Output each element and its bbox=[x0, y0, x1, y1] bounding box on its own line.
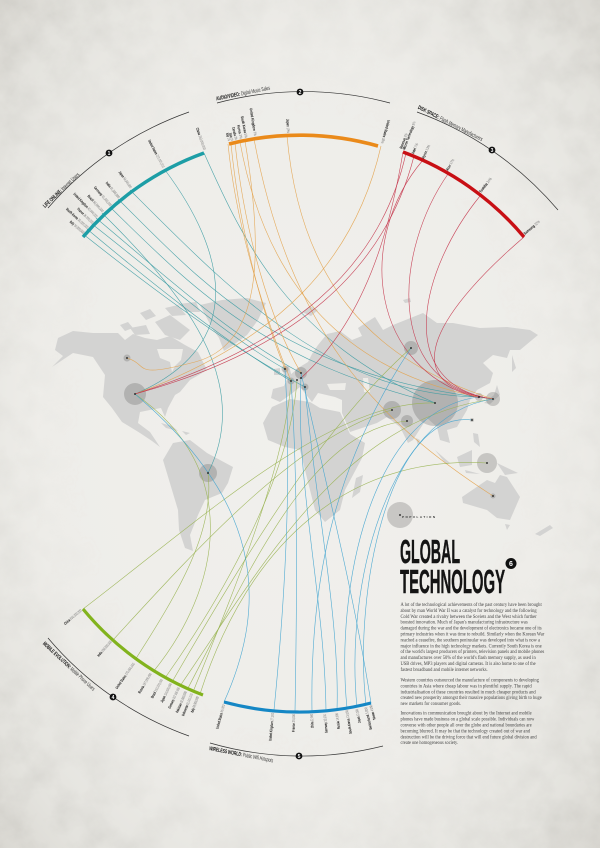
heading: audio video: AUDIO/VIDEO: Digital Music Sales bbox=[216, 86, 271, 102]
labels: internet users: China 253,000,000 bbox=[195, 127, 207, 151]
labels: mobile phone users: Japan 110,000,000 bbox=[159, 682, 173, 703]
labels: music sales: Canada 2% bbox=[231, 126, 239, 141]
labels: internet users: South Korea 35,000,000 bbox=[65, 206, 90, 230]
body text: Cold War created a rivalry between the Soviets and the West which further bbox=[400, 613, 537, 620]
labels: internet users: Brazil 50,000,000 bbox=[86, 194, 105, 214]
outer arc 1 bbox=[48, 112, 189, 208]
labels: mobile phone users: Germany 107,000,000 bbox=[167, 686, 181, 709]
flash memory connection lines bbox=[135, 152, 524, 399]
heading: mobile evolution: MOBILE EVOLUTION: Mobile Phone Users bbox=[41, 641, 96, 693]
music sales connection lines bbox=[127, 136, 493, 496]
heading: life online: LIFE ONLINE: Internet Users bbox=[42, 172, 81, 209]
bullet 2: 2 bbox=[299, 90, 302, 96]
body text: damaged during the war and the development of electronics became one of its bbox=[400, 625, 542, 632]
body text: boosted innovation. Much of Japan's manufacturing infrastructure was bbox=[400, 619, 528, 626]
bullet 1: 1 bbox=[108, 151, 111, 157]
labels: wifi hotspots: Japan 12,000 bbox=[354, 708, 362, 724]
body text: A lot of the technological achievements of the past century have been brought bbox=[400, 601, 542, 608]
population legend bbox=[387, 502, 435, 528]
body text: Western countries outsourced the manufacture of components to developing bbox=[400, 676, 539, 684]
labels: mobile phone users bbox=[63, 608, 200, 717]
bullet 1 bbox=[106, 150, 112, 157]
labels: mobile phone users: Russia 187,000,000 bbox=[137, 671, 153, 694]
bullet 5: 5 bbox=[298, 754, 301, 760]
madagascar bbox=[352, 475, 363, 498]
labels: mobile phone users: United States 270,000,000 bbox=[114, 661, 136, 690]
bar: flash memory bbox=[403, 152, 524, 237]
africa bbox=[263, 399, 365, 522]
labels: music sales: Spain 1% bbox=[228, 132, 235, 141]
labels: flash memory: Renesas 3% bbox=[398, 132, 409, 149]
mobile phone connection lines bbox=[83, 348, 493, 694]
bullet 5 bbox=[296, 753, 302, 760]
panel: disk space bbox=[398, 105, 558, 237]
bullet 3 bbox=[489, 147, 495, 154]
labels: wifi hotspots: France 25,000 bbox=[291, 713, 296, 732]
greenland bbox=[200, 298, 266, 351]
bar: music sales bbox=[229, 135, 378, 146]
population legend: POPULATION bbox=[402, 515, 435, 519]
hub dots bbox=[126, 347, 494, 497]
body text: Innovations in communication brought about by the Internet and mobile bbox=[400, 711, 532, 717]
body text: created new prosperity amongst their massive populations giving birth to huge bbox=[400, 695, 542, 701]
labels: wifi hotspots: United Kingdom 27,000 bbox=[267, 712, 275, 741]
south america bbox=[163, 440, 233, 551]
labels: internet users bbox=[65, 127, 207, 235]
labels: internet users: Japan 94,000,000 bbox=[118, 170, 134, 190]
north america bbox=[52, 331, 207, 447]
labels: music sales: Italy 1% bbox=[225, 132, 232, 142]
inland seas bbox=[327, 378, 370, 392]
internet connection lines bbox=[83, 153, 493, 473]
body text: industrialisation of these countries resulted in much cheaper products and bbox=[400, 688, 536, 695]
labels: music sales: South Korea 5% bbox=[240, 116, 249, 139]
bullet 4 bbox=[110, 694, 116, 701]
labels: flash memory: Samsung 32% bbox=[522, 219, 541, 236]
panel: wireless world bbox=[209, 702, 383, 764]
outer arc 2 bbox=[217, 92, 390, 103]
body text: converse with other people all over the globe and national boundaries are bbox=[400, 722, 532, 728]
labels: wifi hotspots: Taiwan 4,000 bbox=[368, 704, 377, 721]
labels: wifi hotspots bbox=[215, 703, 377, 741]
labels: flash memory bbox=[398, 120, 541, 236]
world map bbox=[52, 298, 553, 551]
bar: internet users bbox=[83, 153, 204, 237]
labels: flash memory: Acer 17% bbox=[445, 157, 456, 172]
outer arc 3 bbox=[417, 112, 558, 210]
labels: internet users: France 36,000,000 bbox=[76, 207, 95, 225]
body text: USB drives, MP3 players and digital cameras. It is also home to one of the bbox=[400, 660, 536, 667]
labels: internet users: United States 220,000,000 bbox=[147, 139, 166, 169]
labels: music sales: United States 38% bbox=[380, 120, 391, 144]
labels: music sales: Japan 19% bbox=[285, 119, 291, 133]
labels: wifi hotspots: Russia 14,000 bbox=[334, 712, 341, 729]
title badge bbox=[506, 558, 516, 569]
body text: countries in Asia where cheap labour was in plentiful supply. The rapid bbox=[400, 682, 532, 689]
body text: primary industries when it was time to rebuild. Similarly when the Korean War bbox=[400, 632, 544, 638]
panel: audio video bbox=[216, 86, 391, 146]
labels: internet users: United Kingdom 40,000,000 bbox=[72, 191, 99, 219]
labels: mobile phone users: Italy 88,000,000 bbox=[189, 695, 200, 713]
labels: flash memory: Intel 7% bbox=[410, 142, 419, 154]
body text: reached a ceasefire, the southern peninsular was developed into what is now a bbox=[400, 636, 541, 643]
labels: internet users: Italy 34,000,000 bbox=[69, 219, 86, 235]
labels: mobile phone users: Pakistan 91,000,000 bbox=[174, 690, 188, 714]
labels: wifi hotspots: Germany 15,000 bbox=[322, 713, 329, 733]
labels: music sales: United Kingdom 7% bbox=[249, 108, 258, 137]
arctic islands bbox=[120, 302, 200, 340]
heading: wireless world: WIRELESS WORLD: Public Wifi Hotspots bbox=[209, 746, 274, 764]
australia bbox=[462, 475, 520, 520]
body text: and manufactures over 50% of the world's flash memory supply, as used in bbox=[400, 654, 536, 661]
labels: mobile phone users: China 634,000,000 bbox=[63, 608, 83, 626]
bar: wifi hotspots bbox=[224, 702, 371, 712]
outer arc 4 bbox=[48, 638, 189, 736]
body text: new markets for consumer goods. bbox=[400, 700, 461, 707]
body text: about by man World War II was a catalyst for technology and the following bbox=[400, 607, 537, 614]
body text: phones have made business on a global scale possible. Individuals can now bbox=[400, 717, 534, 723]
bullet 3: 3 bbox=[491, 148, 494, 154]
labels: wifi hotspots: Switzerland 5,000 bbox=[363, 706, 373, 730]
caribbean bbox=[161, 423, 190, 435]
body text: of the world's largest producers of printers, television panels and mobile phones bbox=[400, 648, 544, 655]
title bbox=[400, 533, 505, 600]
bar: mobile phone users bbox=[83, 609, 203, 695]
labels: mobile phone users: Brazil 150,000,000 bbox=[150, 678, 164, 699]
labels: wifi hotspots: South Korea 13,000 bbox=[344, 709, 353, 734]
body text bbox=[400, 601, 544, 746]
labels: music sales bbox=[225, 108, 391, 144]
body text: create one homogeneous society. bbox=[400, 740, 458, 746]
population circles bbox=[124, 341, 500, 498]
panel: mobile evolution bbox=[41, 608, 203, 736]
heading: disk space: DISK SPACE: Flash Memory Manufacturers bbox=[417, 105, 484, 143]
hudson bay bbox=[157, 349, 183, 372]
title badge: 6 bbox=[509, 561, 513, 568]
labels: flash memory: Hynix 13% bbox=[420, 143, 431, 159]
bullet 4: 4 bbox=[112, 695, 115, 701]
body text: fastest broadband and mobile internet networks. bbox=[400, 666, 488, 673]
body text: major influence in the high technology markets. Currently South Korea is one bbox=[400, 642, 542, 649]
labels: mobile phone users: India 296,000,000 bbox=[96, 639, 113, 658]
eurasia bbox=[271, 313, 538, 443]
labels: wifi hotspots: China 22,000 bbox=[309, 713, 315, 728]
labels: wifi hotspots: United States 66,000 bbox=[215, 703, 226, 729]
islands bbox=[274, 298, 553, 536]
labels: flash memory: Micron Technology 5% bbox=[401, 120, 417, 150]
bullet 2 bbox=[297, 89, 303, 96]
panel: life online bbox=[42, 112, 207, 237]
body text: becoming blurred. It may be that the technology created out of war and bbox=[400, 727, 530, 734]
labels: internet users: India 81,000,000 bbox=[105, 180, 121, 200]
wifi hotspot connection lines bbox=[135, 348, 493, 712]
outer arc 5 bbox=[210, 743, 383, 756]
body text: destruction will be the driving force that will end future global division and bbox=[400, 733, 537, 740]
title: GLOBAL bbox=[400, 533, 460, 570]
labels: flash memory: Toshiba 24% bbox=[478, 176, 493, 194]
labels: music sales: Korea 3% bbox=[236, 124, 244, 140]
labels: internet users: Germany 61,000,000 bbox=[93, 185, 113, 208]
labels: mobile phone users: Indonesia 91,000,000 bbox=[180, 692, 194, 717]
